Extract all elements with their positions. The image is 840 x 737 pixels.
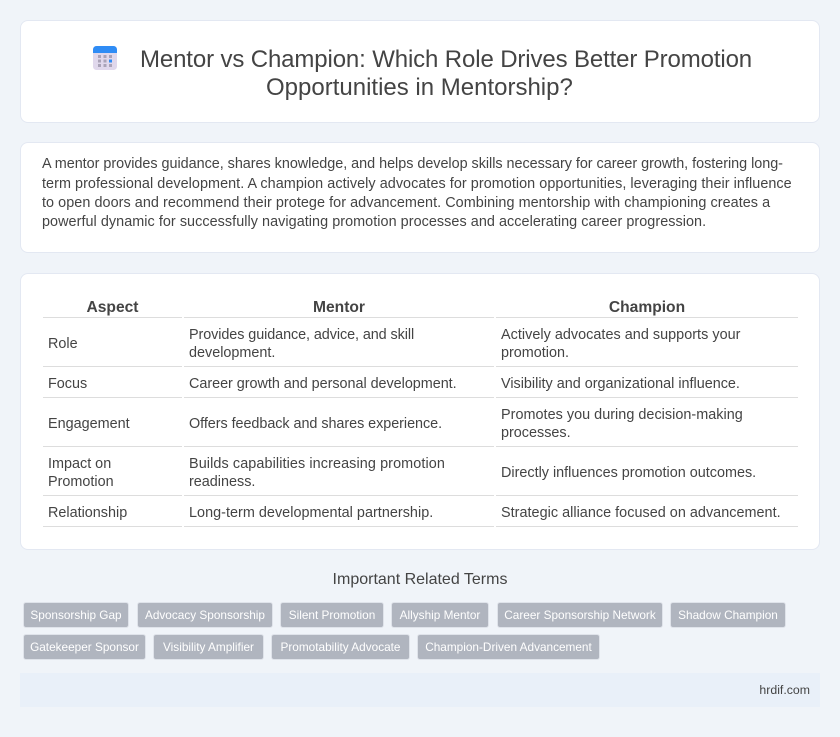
related terms tags: Silent Promotion bbox=[289, 608, 375, 622]
intro panel bbox=[20, 142, 820, 253]
table header: Aspect bbox=[86, 299, 138, 316]
related terms tags: Allyship Mentor bbox=[400, 608, 480, 622]
related terms tags: Shadow Champion bbox=[678, 608, 778, 622]
row: impact on promotion: Directly influences promotion outcomes. bbox=[501, 465, 756, 481]
header panel bbox=[20, 20, 820, 123]
comparison table panel bbox=[20, 273, 820, 550]
intro text: to open doors and recommend their protege for advancement. Combining mentorship with championing creates a bbox=[42, 195, 770, 211]
row: relationship bbox=[48, 505, 781, 521]
intro text bbox=[42, 156, 792, 230]
related terms tags: Advocacy Sponsorship bbox=[145, 608, 265, 622]
row: impact on promotion: readiness. bbox=[189, 474, 255, 490]
row: impact on promotion bbox=[48, 456, 756, 490]
title: Mentor vs Champion: Which Role Drives Better Promotion bbox=[140, 46, 752, 73]
row: engagement: Engagement bbox=[48, 416, 130, 432]
related terms tags: Sponsorship Gap bbox=[30, 608, 122, 622]
row: relationship: Relationship bbox=[48, 505, 127, 521]
title: Opportunities in Mentorship? bbox=[266, 74, 573, 101]
table header: Mentor bbox=[313, 299, 365, 316]
row: role: Provides guidance, advice, and skill bbox=[189, 327, 414, 343]
title bbox=[140, 46, 752, 101]
table header bbox=[86, 299, 685, 316]
row: engagement: Offers feedback and shares experience. bbox=[189, 416, 442, 432]
row: focus: Focus bbox=[48, 376, 87, 392]
row: focus: Visibility and organizational influence. bbox=[501, 376, 740, 392]
row: role: development. bbox=[189, 345, 275, 361]
row: role: promotion. bbox=[501, 345, 569, 361]
row: engagement: Promotes you during decision-making bbox=[501, 407, 743, 423]
row: role: Actively advocates and supports your bbox=[501, 327, 740, 343]
footer bar bbox=[20, 673, 820, 707]
related terms heading: Important Related Terms bbox=[333, 571, 507, 588]
row: impact on promotion: Promotion bbox=[48, 474, 114, 490]
row: role bbox=[48, 327, 740, 361]
icon: calendar bbox=[93, 46, 117, 70]
row: relationship: Long-term developmental partnership. bbox=[189, 505, 433, 521]
row: engagement bbox=[48, 407, 743, 441]
related terms tags bbox=[23, 602, 786, 660]
intro text: term professional development. A champion actively advocates for promotion opportunities, leveraging their influence bbox=[42, 176, 792, 192]
row: impact on promotion: Builds capabilities increasing promotion bbox=[189, 456, 445, 472]
comparison table bbox=[43, 299, 798, 527]
intro text: powerful dynamic for successfully navigating promotion processes and accelerating career progression. bbox=[42, 214, 706, 230]
related terms tags: Career Sponsorship Network bbox=[504, 608, 656, 622]
related terms tags: Promotability Advocate bbox=[280, 640, 400, 654]
row: role: Role bbox=[48, 336, 78, 352]
row: engagement: processes. bbox=[501, 425, 571, 441]
row: impact on promotion: Impact on bbox=[48, 456, 111, 472]
related terms tags: Champion-Driven Advancement bbox=[425, 640, 592, 654]
intro text: A mentor provides guidance, shares knowledge, and helps develop skills necessary for career growth, fostering long- bbox=[42, 156, 783, 172]
table header: Champion bbox=[609, 299, 685, 316]
row: focus bbox=[48, 376, 740, 392]
footer source: hrdif.com bbox=[759, 683, 810, 697]
related terms tags: Visibility Amplifier bbox=[163, 640, 254, 654]
related terms tags: Gatekeeper Sponsor bbox=[30, 640, 139, 654]
row: focus: Career growth and personal development. bbox=[189, 376, 457, 392]
row: relationship: Strategic alliance focused on advancement. bbox=[501, 505, 781, 521]
